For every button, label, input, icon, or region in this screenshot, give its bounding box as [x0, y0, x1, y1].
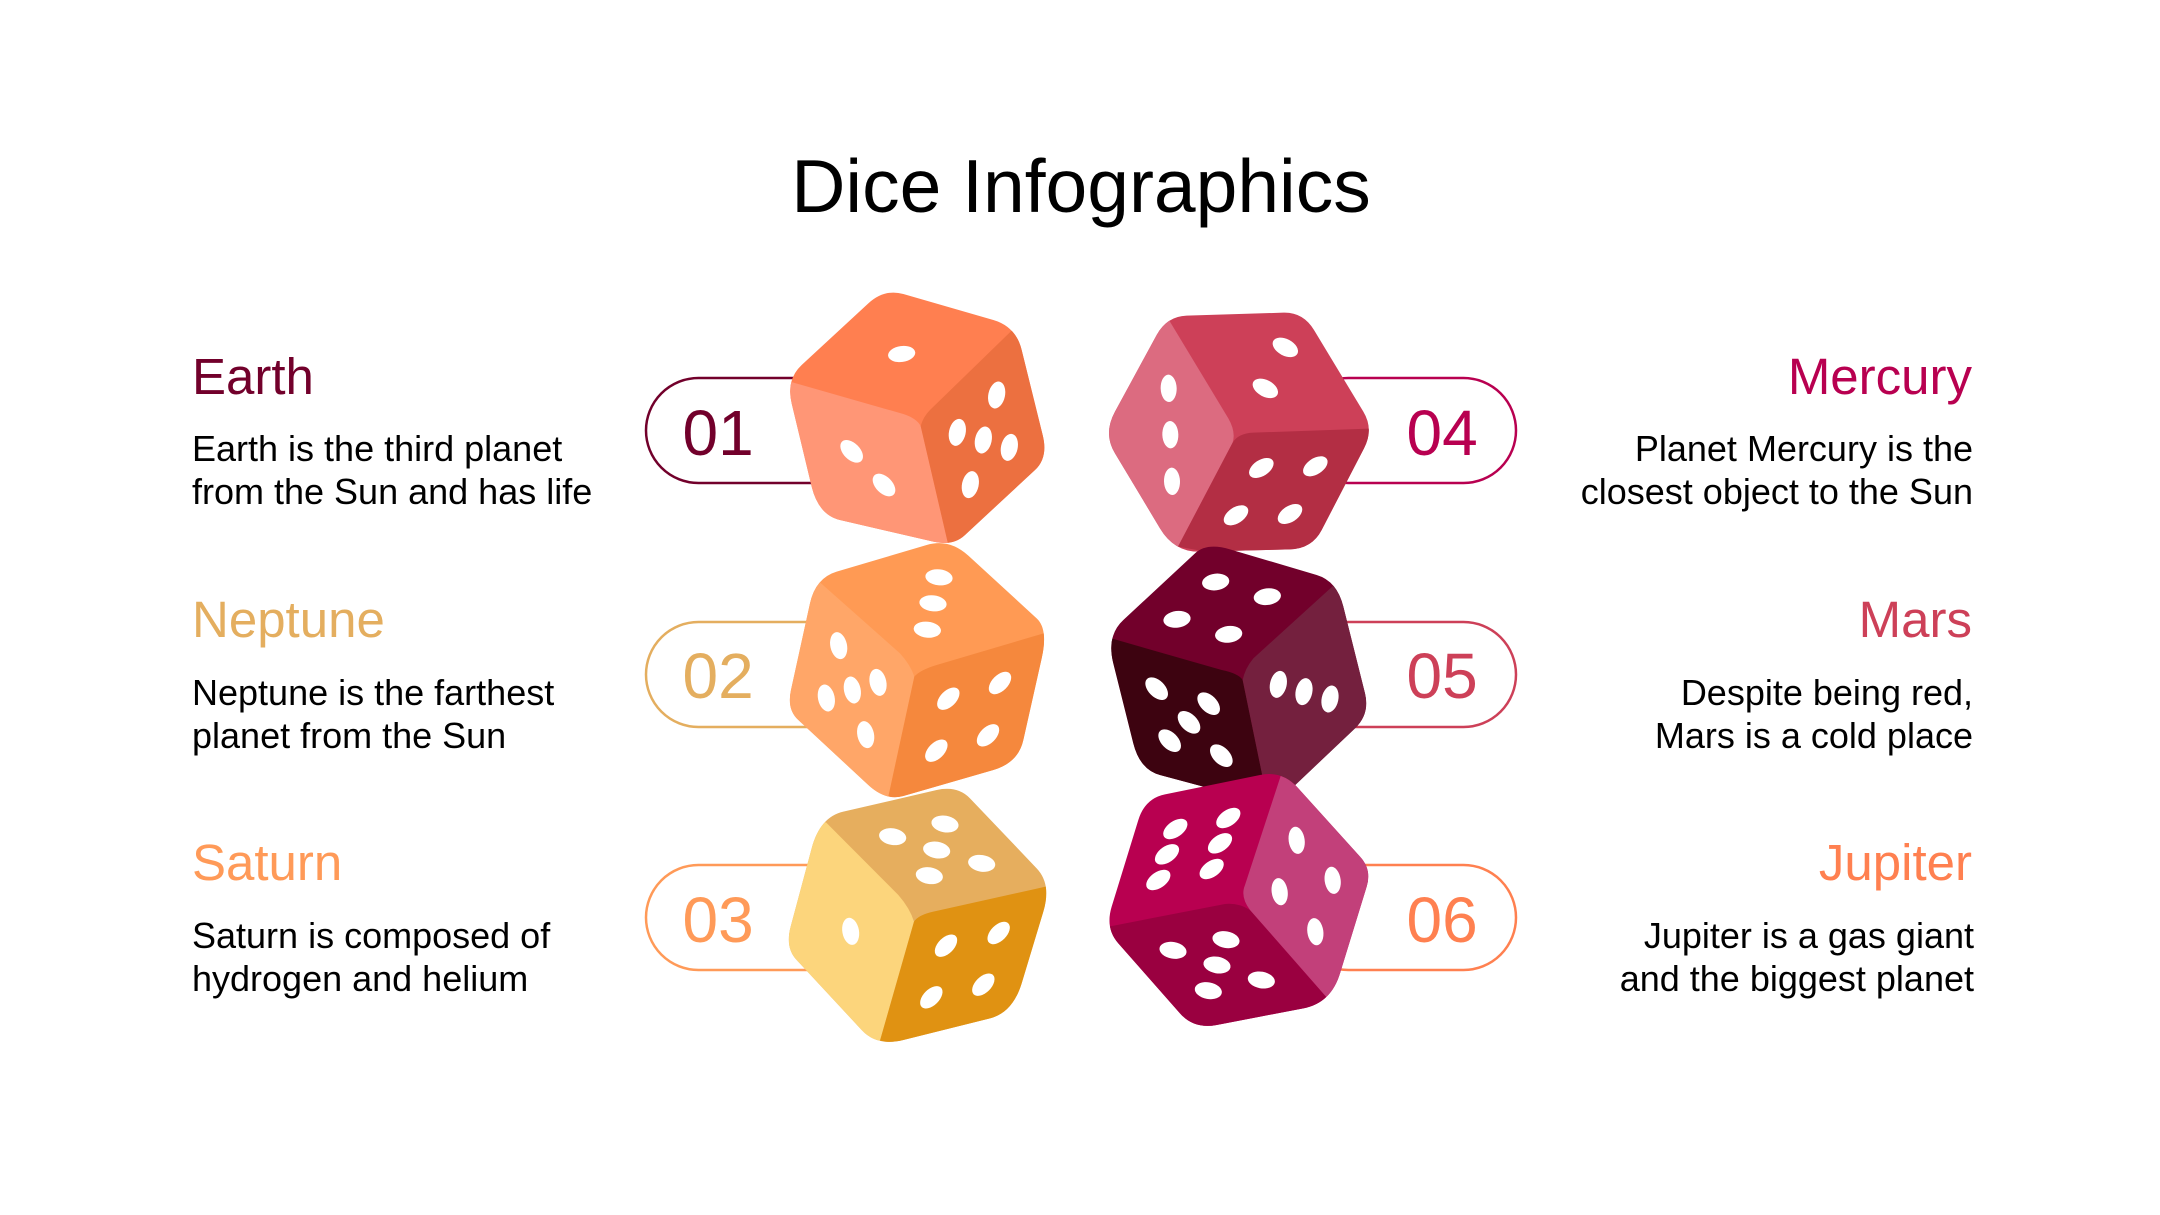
number pill 01: [646, 378, 866, 483]
number pill 06: [1296, 865, 1516, 970]
text block: Jupiter: and the biggest planet: [1620, 958, 1974, 999]
text block: Mercury: Planet Mercury is the: [1635, 428, 1973, 469]
number pill 04: 04: [1406, 397, 1478, 469]
number pill 03: [646, 865, 866, 970]
text block: Earth: Earth: [192, 348, 314, 405]
icon: die 6, magenta: [1110, 774, 1368, 1026]
text block: Saturn: Saturn: [192, 834, 342, 891]
number pill 04: [1296, 378, 1516, 483]
text block: Saturn: hydrogen and helium: [192, 958, 528, 999]
number pill 03: 03: [682, 884, 754, 956]
text block: Earth: from the Sun and has life: [192, 471, 592, 512]
text block: Mercury: closest object to the Sun: [1581, 471, 1973, 512]
text block: Mars: Mars is a cold place: [1655, 715, 1973, 756]
icon: die 1, coral: [790, 292, 1044, 543]
number pill 02: [646, 622, 866, 727]
text block: Neptune: Neptune is the farthest: [192, 672, 554, 713]
number pill 02: 02: [682, 640, 754, 712]
text block: Jupiter: Jupiter: [1819, 834, 1972, 891]
text block: Jupiter: [1620, 834, 1974, 999]
text block: Earth: [192, 348, 592, 512]
text block: Mars: Mars: [1859, 591, 1972, 648]
text block: Neptune: planet from the Sun: [192, 715, 506, 756]
number pill 01: 01: [682, 397, 754, 469]
text block: Neptune: Neptune: [192, 591, 385, 648]
text block: Saturn: Saturn is composed of: [192, 915, 551, 956]
number pill 05: [1296, 622, 1516, 727]
text block: Mars: [1655, 591, 1973, 756]
title: Dice Infographics: [791, 144, 1371, 228]
text block: Neptune: [192, 591, 554, 756]
text block: Mercury: [1581, 348, 1973, 512]
text block: Earth: Earth is the third planet: [192, 428, 562, 469]
icon: die 5, dark maroon: [1111, 546, 1366, 787]
text block: Mercury: Mercury: [1788, 348, 1972, 405]
number pill 06: 06: [1406, 884, 1478, 956]
text block: Jupiter: Jupiter is a gas giant: [1644, 915, 1974, 956]
text block: Saturn: [192, 834, 551, 999]
text block: Mars: Despite being red,: [1681, 672, 1973, 713]
icon: die 4, rose: [1109, 312, 1369, 552]
icon: die 3, yellow: [788, 788, 1046, 1042]
number pill 05: 05: [1406, 640, 1478, 712]
icon: die 2, orange: [790, 543, 1044, 798]
